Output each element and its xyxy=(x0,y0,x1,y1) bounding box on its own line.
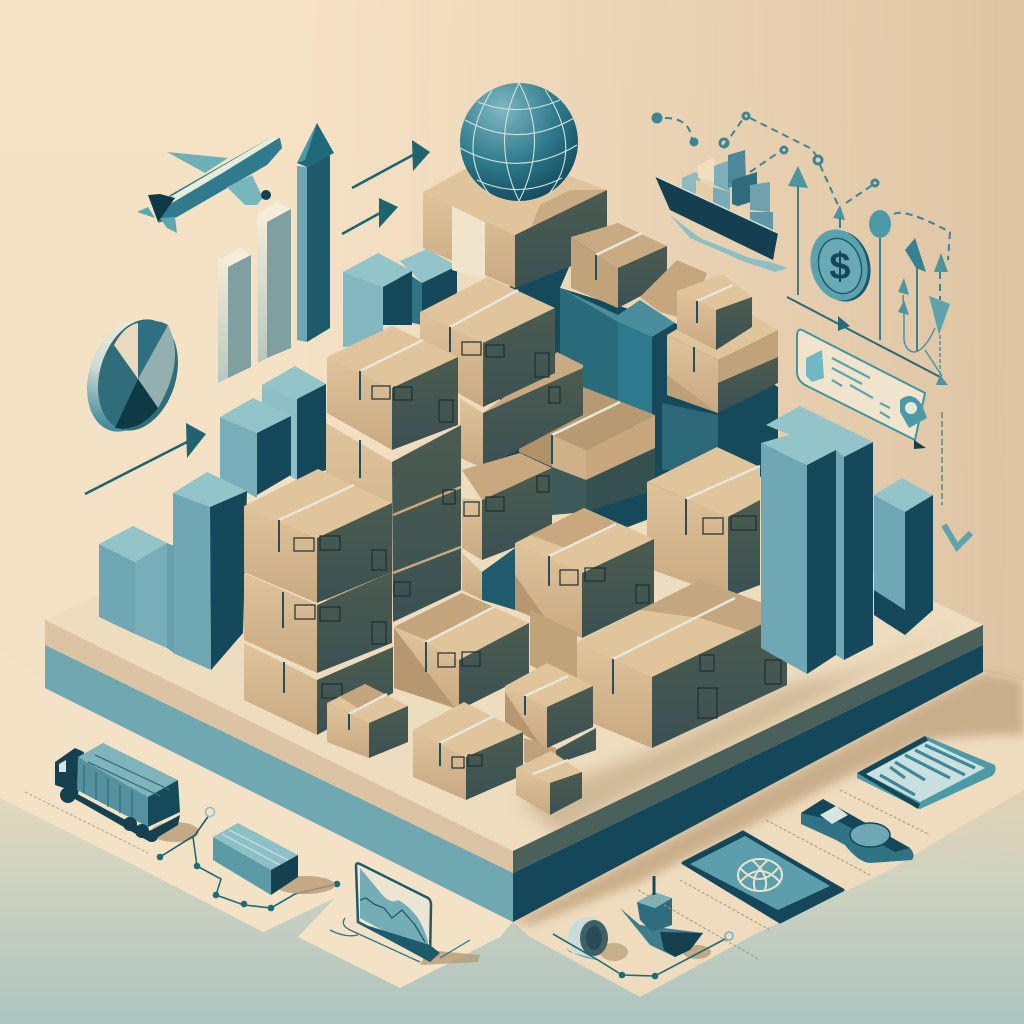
device dial xyxy=(850,823,890,847)
bar back left xyxy=(262,366,326,480)
teal bars left xyxy=(99,366,326,670)
box small d xyxy=(327,684,408,758)
teal bars right xyxy=(761,406,933,674)
platform right face xyxy=(513,645,983,922)
card location pin xyxy=(900,396,927,428)
truck cab xyxy=(55,748,84,795)
device body xyxy=(801,799,914,863)
card lines xyxy=(832,358,890,418)
truck shadow xyxy=(151,822,199,842)
bar r3 xyxy=(874,478,933,635)
container left xyxy=(213,837,271,895)
trailer side xyxy=(77,757,148,827)
container shadow xyxy=(275,876,335,894)
dollar coin icon xyxy=(803,223,878,308)
box flat xyxy=(640,260,707,320)
plane tail low xyxy=(160,217,177,233)
box a2 xyxy=(244,572,392,673)
card arrow xyxy=(914,440,926,449)
block b xyxy=(343,253,412,347)
box f xyxy=(505,663,593,748)
tablet icon xyxy=(683,832,843,922)
box q xyxy=(571,223,667,308)
platform left stripe xyxy=(45,620,513,873)
block center mass xyxy=(500,265,778,530)
platform xyxy=(45,400,983,922)
tablet screen xyxy=(690,836,830,910)
globe icon xyxy=(460,83,578,201)
pie disc xyxy=(85,309,191,441)
box a xyxy=(244,469,392,603)
box big i xyxy=(530,580,787,748)
monitor stand xyxy=(356,922,440,962)
box under f xyxy=(524,728,596,775)
container icon xyxy=(213,823,335,895)
dotted ground lines right xyxy=(638,790,930,960)
box p xyxy=(677,274,752,350)
box l xyxy=(462,453,552,610)
cargo ship icon xyxy=(655,150,788,272)
plane tail low left xyxy=(137,207,155,218)
box g xyxy=(413,702,523,800)
platform left face xyxy=(45,645,513,922)
dotted ground text lines xyxy=(25,792,148,853)
tablet globe logo xyxy=(738,859,782,891)
container top xyxy=(213,823,298,870)
bar r2 xyxy=(766,406,873,660)
box c xyxy=(420,277,555,407)
bar second xyxy=(220,398,291,498)
balloon pin xyxy=(869,210,891,238)
route chart left xyxy=(158,808,340,910)
trailer end xyxy=(148,780,180,827)
ship water shadow xyxy=(670,215,788,272)
device qr xyxy=(820,806,848,824)
tape roll icon xyxy=(565,917,628,961)
ground tiles right xyxy=(513,672,1024,997)
box stack a xyxy=(244,469,393,735)
long diagonal arrow xyxy=(787,297,948,385)
route lines top right xyxy=(653,113,950,340)
pie rim xyxy=(74,310,180,442)
plane body window band xyxy=(170,138,279,203)
block a xyxy=(400,249,457,325)
bar tall xyxy=(173,472,247,670)
floor shadows xyxy=(520,652,902,834)
monitor chart icon xyxy=(330,863,480,965)
box m with lower block xyxy=(519,387,655,515)
plane body xyxy=(158,138,282,223)
trailer top xyxy=(78,743,178,797)
small ship shadow xyxy=(683,945,711,959)
plane wing back xyxy=(167,152,228,173)
doc screen xyxy=(866,741,985,802)
small ship mast xyxy=(652,876,656,895)
teal blocks back xyxy=(343,249,778,530)
ground tiles left xyxy=(0,650,513,988)
platform right stripe xyxy=(513,625,983,873)
monitor shadow xyxy=(420,950,480,965)
doc lines xyxy=(880,745,975,795)
pie chart icon xyxy=(74,309,191,442)
box b xyxy=(327,326,458,450)
growth bars xyxy=(218,123,334,383)
plane tail fin xyxy=(148,194,175,222)
truck icon xyxy=(55,743,199,842)
box top with globe xyxy=(423,150,607,288)
arrow head up xyxy=(788,166,808,188)
growth bar 1 xyxy=(218,248,251,383)
scanner device icon xyxy=(801,799,914,863)
route nodes xyxy=(653,113,878,186)
arrow second xyxy=(342,198,398,234)
doc body xyxy=(857,736,996,809)
bar r1 xyxy=(761,432,836,674)
tablet body xyxy=(683,832,843,922)
dollar sign: $ xyxy=(829,246,851,288)
plane wing front xyxy=(227,175,263,205)
dashed line with tick xyxy=(942,412,971,547)
card lock icon xyxy=(806,350,824,382)
arrow left xyxy=(85,423,206,494)
small ship cabin xyxy=(637,898,672,932)
container right xyxy=(271,855,298,895)
bar short xyxy=(99,526,174,653)
monitor chart area xyxy=(360,868,428,955)
box e xyxy=(394,593,529,710)
box below c xyxy=(460,352,583,468)
small ship icon xyxy=(620,876,711,959)
small ship hull xyxy=(620,908,703,957)
info card xyxy=(797,330,927,449)
route chart right xyxy=(553,932,733,978)
ship hull xyxy=(655,176,778,260)
growth bar arrow xyxy=(297,123,334,342)
box a3 xyxy=(244,643,393,735)
box j xyxy=(515,508,654,638)
box k xyxy=(647,447,760,597)
box h xyxy=(516,751,582,815)
plane engine xyxy=(261,190,271,200)
truck chassis and wheels xyxy=(68,790,180,842)
growth bar 2 xyxy=(257,202,291,363)
platform top xyxy=(45,400,983,851)
platform shadow xyxy=(513,672,1024,925)
plane icon xyxy=(137,138,282,233)
box n xyxy=(667,300,778,413)
up arrows cluster xyxy=(898,238,950,380)
box stack column b xyxy=(326,326,461,622)
monitor frame xyxy=(356,863,431,960)
container stack xyxy=(682,150,773,237)
arrow top xyxy=(352,140,430,188)
stack lower xyxy=(326,423,461,622)
document tablet icon xyxy=(857,736,996,809)
pie sectors xyxy=(114,323,138,379)
